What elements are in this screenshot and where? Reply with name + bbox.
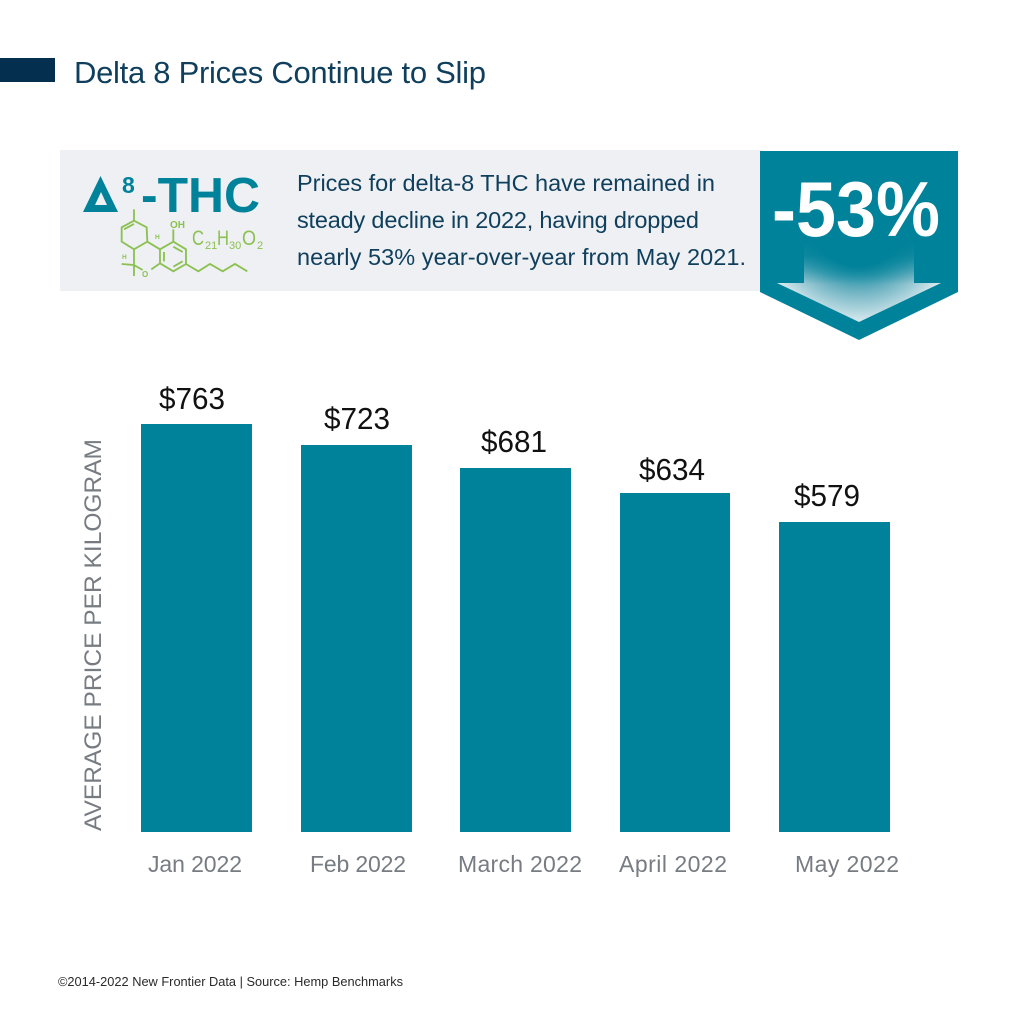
molecular formula: H bbox=[217, 227, 229, 250]
molecule labels: H bbox=[155, 234, 160, 241]
bar: Feb 2022: Feb 2022 bbox=[310, 851, 406, 877]
molecule diagram bbox=[122, 209, 247, 276]
bar: Jan 2022: Jan 2022 bbox=[148, 851, 242, 877]
delta symbol bbox=[83, 176, 118, 212]
molecular formula: C bbox=[192, 227, 204, 250]
bar: March 2022: March 2022 bbox=[458, 851, 582, 877]
bar: April 2022 bbox=[619, 452, 730, 877]
molecular formula: 21 bbox=[205, 240, 217, 252]
title accent bar bbox=[0, 58, 55, 82]
arrow bbox=[777, 240, 941, 322]
molecular formula: 30 bbox=[229, 240, 241, 252]
percentage: -53% bbox=[772, 165, 940, 253]
molecule labels bbox=[122, 220, 185, 279]
molecular formula: O bbox=[242, 227, 256, 250]
bar: March 2022 bbox=[458, 424, 582, 877]
bar: May 2022: $579 bbox=[794, 478, 860, 513]
summary text: Prices for delta-8 THC have remained in bbox=[297, 170, 715, 196]
callout: -53% down arrow bbox=[760, 151, 958, 340]
bar: April 2022: April 2022 bbox=[619, 851, 727, 877]
panel: delta-8 summary bbox=[60, 150, 762, 291]
logo text: -THC bbox=[141, 169, 260, 223]
bar: April 2022: $634 bbox=[639, 452, 705, 487]
summary text: steady decline in 2022, having dropped bbox=[297, 207, 699, 233]
summary text: nearly 53% year-over-year from May 2021. bbox=[297, 244, 746, 270]
molecular formula bbox=[192, 227, 263, 252]
y axis label: AVERAGE PRICE PER KILOGRAM bbox=[80, 439, 107, 831]
molecule labels: O bbox=[142, 270, 148, 279]
bar: Jan 2022 bbox=[141, 381, 252, 877]
bar: May 2022 bbox=[779, 478, 899, 877]
bar: March 2022: $681 bbox=[481, 424, 547, 459]
bar chart bbox=[80, 381, 899, 877]
title: Delta 8 Prices Continue to Slip bbox=[74, 55, 486, 90]
icon: delta-8 THC logo bbox=[83, 169, 263, 279]
bar: Feb 2022 bbox=[301, 401, 412, 877]
summary text bbox=[297, 170, 746, 270]
bar: May 2022: May 2022 bbox=[795, 851, 899, 877]
molecule labels: OH bbox=[170, 220, 185, 231]
bar: Feb 2022: $723 bbox=[324, 401, 390, 436]
bar: Jan 2022: $763 bbox=[159, 381, 225, 416]
source footer: ©2014-2022 New Frontier Data | Source: Hemp Benchmarks bbox=[58, 975, 403, 989]
molecule labels: H bbox=[122, 254, 127, 261]
molecular formula: 2 bbox=[257, 240, 263, 252]
logo superscript: 8 bbox=[122, 172, 135, 198]
